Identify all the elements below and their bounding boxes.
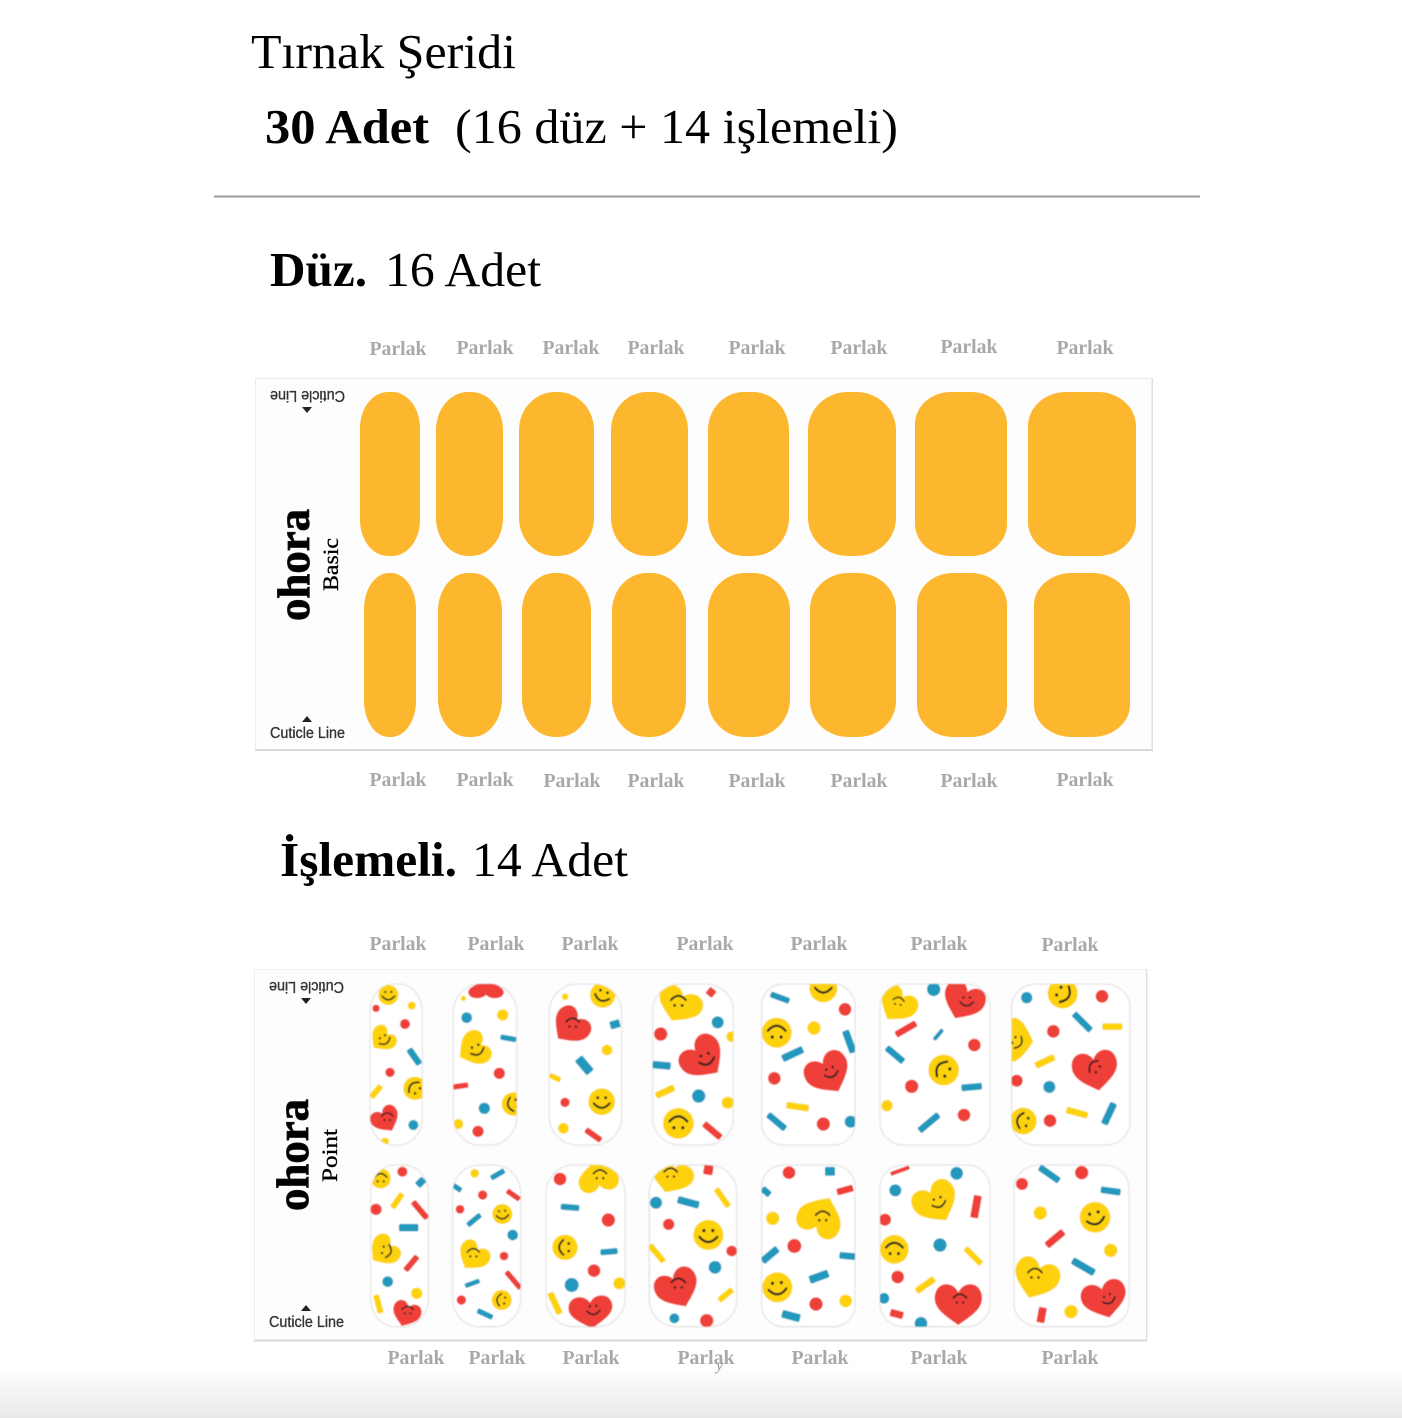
cuticle line top marker: Cuticle Line — [269, 978, 344, 995]
labels below decorated sheet: Parlak — [678, 1348, 735, 1369]
stray letter under label: y — [714, 1357, 724, 1374]
nail: top 2 — [452, 983, 518, 1146]
labels below decorated sheet: Parlak — [468, 1348, 526, 1369]
labels above plain sheet: Parlak — [728, 338, 786, 359]
cuticle line bottom marker: Cuticle Line — [269, 1314, 344, 1331]
brand: ohora Point: Point — [317, 1129, 342, 1182]
heading: decorated strips: 14 Adet — [472, 832, 628, 887]
labels below plain sheet: Parlak — [370, 770, 427, 791]
nail: top 1 — [369, 984, 424, 1146]
labels above plain sheet: Parlak — [542, 338, 600, 359]
nail: bottom 5 — [760, 1165, 856, 1327]
page bottom fade — [0, 1366, 1402, 1418]
labels above plain sheet: Parlak — [830, 338, 888, 359]
labels above plain sheet: Parlak — [456, 338, 514, 359]
labels above decorated sheet: Parlak — [562, 934, 619, 955]
labels below plain sheet: Parlak — [728, 771, 786, 792]
nail: top 5 — [762, 974, 858, 1145]
subtitle: total count: (16 düz + 14 işlemeli) — [455, 99, 898, 154]
labels above decorated sheet: Parlak — [1042, 935, 1099, 956]
labels above plain sheet: Parlak — [370, 339, 427, 360]
labels below plain sheet: Parlak — [456, 770, 514, 791]
cuticle line bottom marker — [270, 716, 345, 742]
labels below plain sheet: Parlak — [628, 771, 685, 792]
title: Tırnak Şeridi — [251, 24, 516, 79]
labels above decorated sheet: Parlak — [790, 934, 848, 955]
nail: top 4 — [651, 981, 737, 1145]
nail: top 7 — [999, 978, 1130, 1145]
subtitle: total count: 30 Adet — [265, 99, 430, 154]
labels below decorated sheet — [388, 1348, 1099, 1369]
nail: top 3 — [544, 982, 622, 1145]
heading: decorated strips — [280, 832, 628, 887]
cuticle line top marker — [269, 978, 344, 1004]
nail: bottom 6 — [879, 1165, 990, 1330]
decorated nails: left group — [363, 981, 737, 1331]
nails: top row — [360, 392, 1136, 556]
labels above decorated sheet: Parlak — [370, 934, 427, 955]
cuticle line top marker — [270, 387, 345, 413]
labels below plain sheet — [370, 770, 1114, 792]
cuticle line bottom marker — [269, 1305, 344, 1331]
labels below decorated sheet: Parlak — [910, 1348, 968, 1369]
brand: ohora Basic: ohora — [268, 509, 319, 621]
labels above plain sheet — [370, 337, 1114, 360]
panel: decorated nail sheet — [254, 969, 1148, 1342]
labels below decorated sheet: Parlak — [388, 1348, 445, 1369]
decorated nails: right group — [760, 974, 1131, 1330]
labels below plain sheet: Parlak — [1056, 770, 1114, 791]
labels above plain sheet: Parlak — [1056, 338, 1114, 359]
heading: plain strips — [270, 242, 541, 297]
subtitle: total count — [265, 99, 898, 154]
brand: ohora Point: ohora — [267, 1099, 318, 1211]
panel: plain yellow nail sheet — [255, 378, 1153, 751]
labels below decorated sheet: Parlak — [562, 1348, 620, 1369]
labels above decorated sheet — [370, 934, 1099, 956]
heading: decorated strips: İşlemeli. — [280, 832, 457, 887]
labels above decorated sheet: Parlak — [910, 934, 968, 955]
brand: ohora Basic: Basic — [318, 538, 343, 591]
nail: bottom 4 — [645, 1155, 737, 1327]
nail: top 6 — [871, 976, 990, 1145]
cuticle line top marker: Cuticle Line — [270, 387, 345, 404]
brand: ohora Point — [267, 1099, 342, 1211]
heading: plain strips: 16 Adet — [385, 242, 541, 297]
labels below plain sheet: Parlak — [544, 771, 601, 792]
labels above decorated sheet: Parlak — [468, 934, 525, 955]
nail: bottom 2 — [452, 1165, 522, 1327]
labels below decorated sheet: Parlak — [792, 1348, 849, 1369]
nail: bottom 7 — [1008, 1164, 1131, 1327]
labels below plain sheet: Parlak — [940, 771, 998, 792]
nail: bottom 3 — [546, 1158, 625, 1330]
cuticle line bottom marker: Cuticle Line — [270, 725, 345, 742]
labels below decorated sheet: Parlak — [1042, 1348, 1099, 1369]
labels above decorated sheet: Parlak — [676, 934, 734, 955]
labels below plain sheet: Parlak — [830, 771, 888, 792]
nail: bottom 1 — [370, 1164, 430, 1328]
labels above plain sheet: Parlak — [940, 337, 998, 358]
heading: plain strips: Düz. — [270, 242, 367, 297]
labels above plain sheet: Parlak — [628, 338, 685, 359]
nails: bottom row — [364, 573, 1130, 737]
brand: ohora Basic — [268, 509, 343, 621]
